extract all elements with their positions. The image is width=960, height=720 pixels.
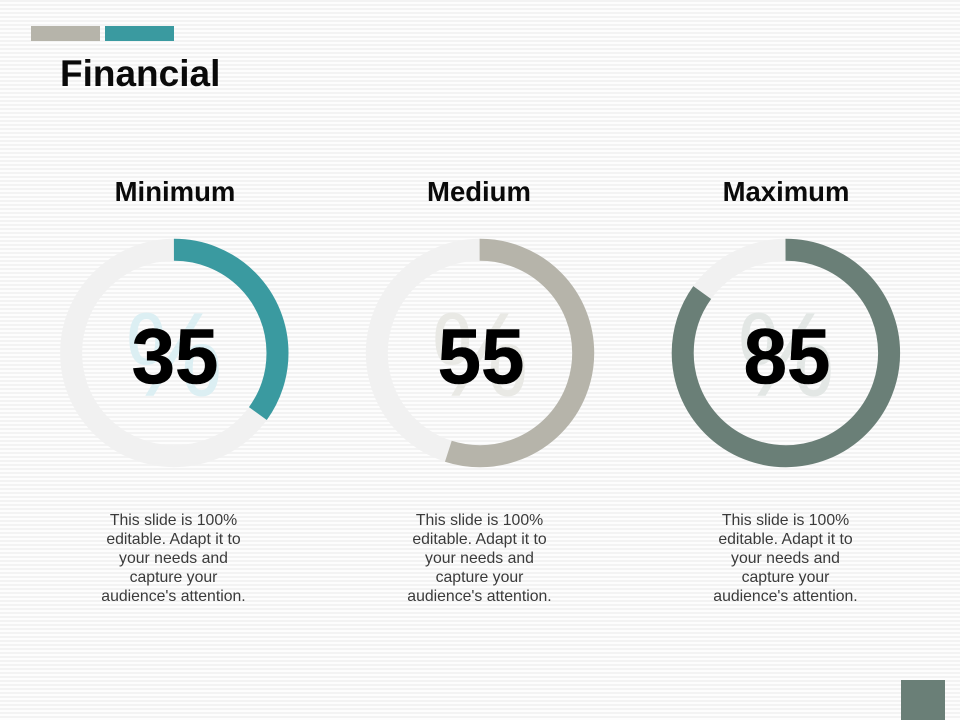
description: minimum: capture your bbox=[130, 569, 217, 586]
donut chart: 55 percent: % bbox=[432, 288, 528, 422]
description: maximum: your needs and bbox=[731, 550, 840, 567]
heading: medium: Medium bbox=[427, 176, 531, 207]
description: medium: audience's attention. bbox=[407, 588, 552, 605]
description: maximum: capture your bbox=[742, 569, 829, 586]
description: medium: This slide is 100% bbox=[416, 512, 543, 529]
description: minimum: audience's attention. bbox=[101, 588, 246, 605]
title: Financial bbox=[60, 53, 220, 94]
donut chart: 55 percent: 55 bbox=[438, 312, 524, 400]
description: medium bbox=[407, 512, 552, 605]
description: maximum: This slide is 100% bbox=[722, 512, 849, 529]
description: minimum: This slide is 100% bbox=[110, 512, 237, 529]
donut chart: 35 percent bbox=[60, 238, 288, 467]
description: maximum bbox=[713, 512, 858, 605]
description: minimum: editable. Adapt it to bbox=[106, 531, 241, 548]
donut chart: 85 percent bbox=[672, 238, 900, 468]
panel: minimum bbox=[60, 176, 288, 605]
description: maximum: audience's attention. bbox=[713, 588, 858, 605]
corner square bbox=[901, 680, 945, 720]
heading: minimum: Minimum bbox=[115, 176, 235, 207]
donut chart: 35 percent: 35 bbox=[132, 312, 218, 400]
description: minimum: your needs and bbox=[119, 550, 228, 567]
donut chart: 85 percent: % bbox=[738, 288, 834, 422]
description: medium: editable. Adapt it to bbox=[412, 531, 547, 548]
description: medium: your needs and bbox=[425, 550, 534, 567]
donut chart: 55 percent bbox=[366, 238, 594, 468]
decorative bar: teal bbox=[105, 26, 174, 41]
panel: maximum bbox=[672, 176, 900, 605]
description: medium: capture your bbox=[436, 569, 523, 586]
description: minimum bbox=[101, 512, 246, 605]
description: maximum: editable. Adapt it to bbox=[718, 531, 853, 548]
donut chart: 85 percent: 85 bbox=[744, 312, 830, 400]
donut chart: 35 percent: % bbox=[126, 288, 222, 422]
heading: maximum: Maximum bbox=[723, 176, 849, 207]
decorative bar: taupe bbox=[31, 26, 100, 41]
panel: medium bbox=[366, 176, 594, 605]
